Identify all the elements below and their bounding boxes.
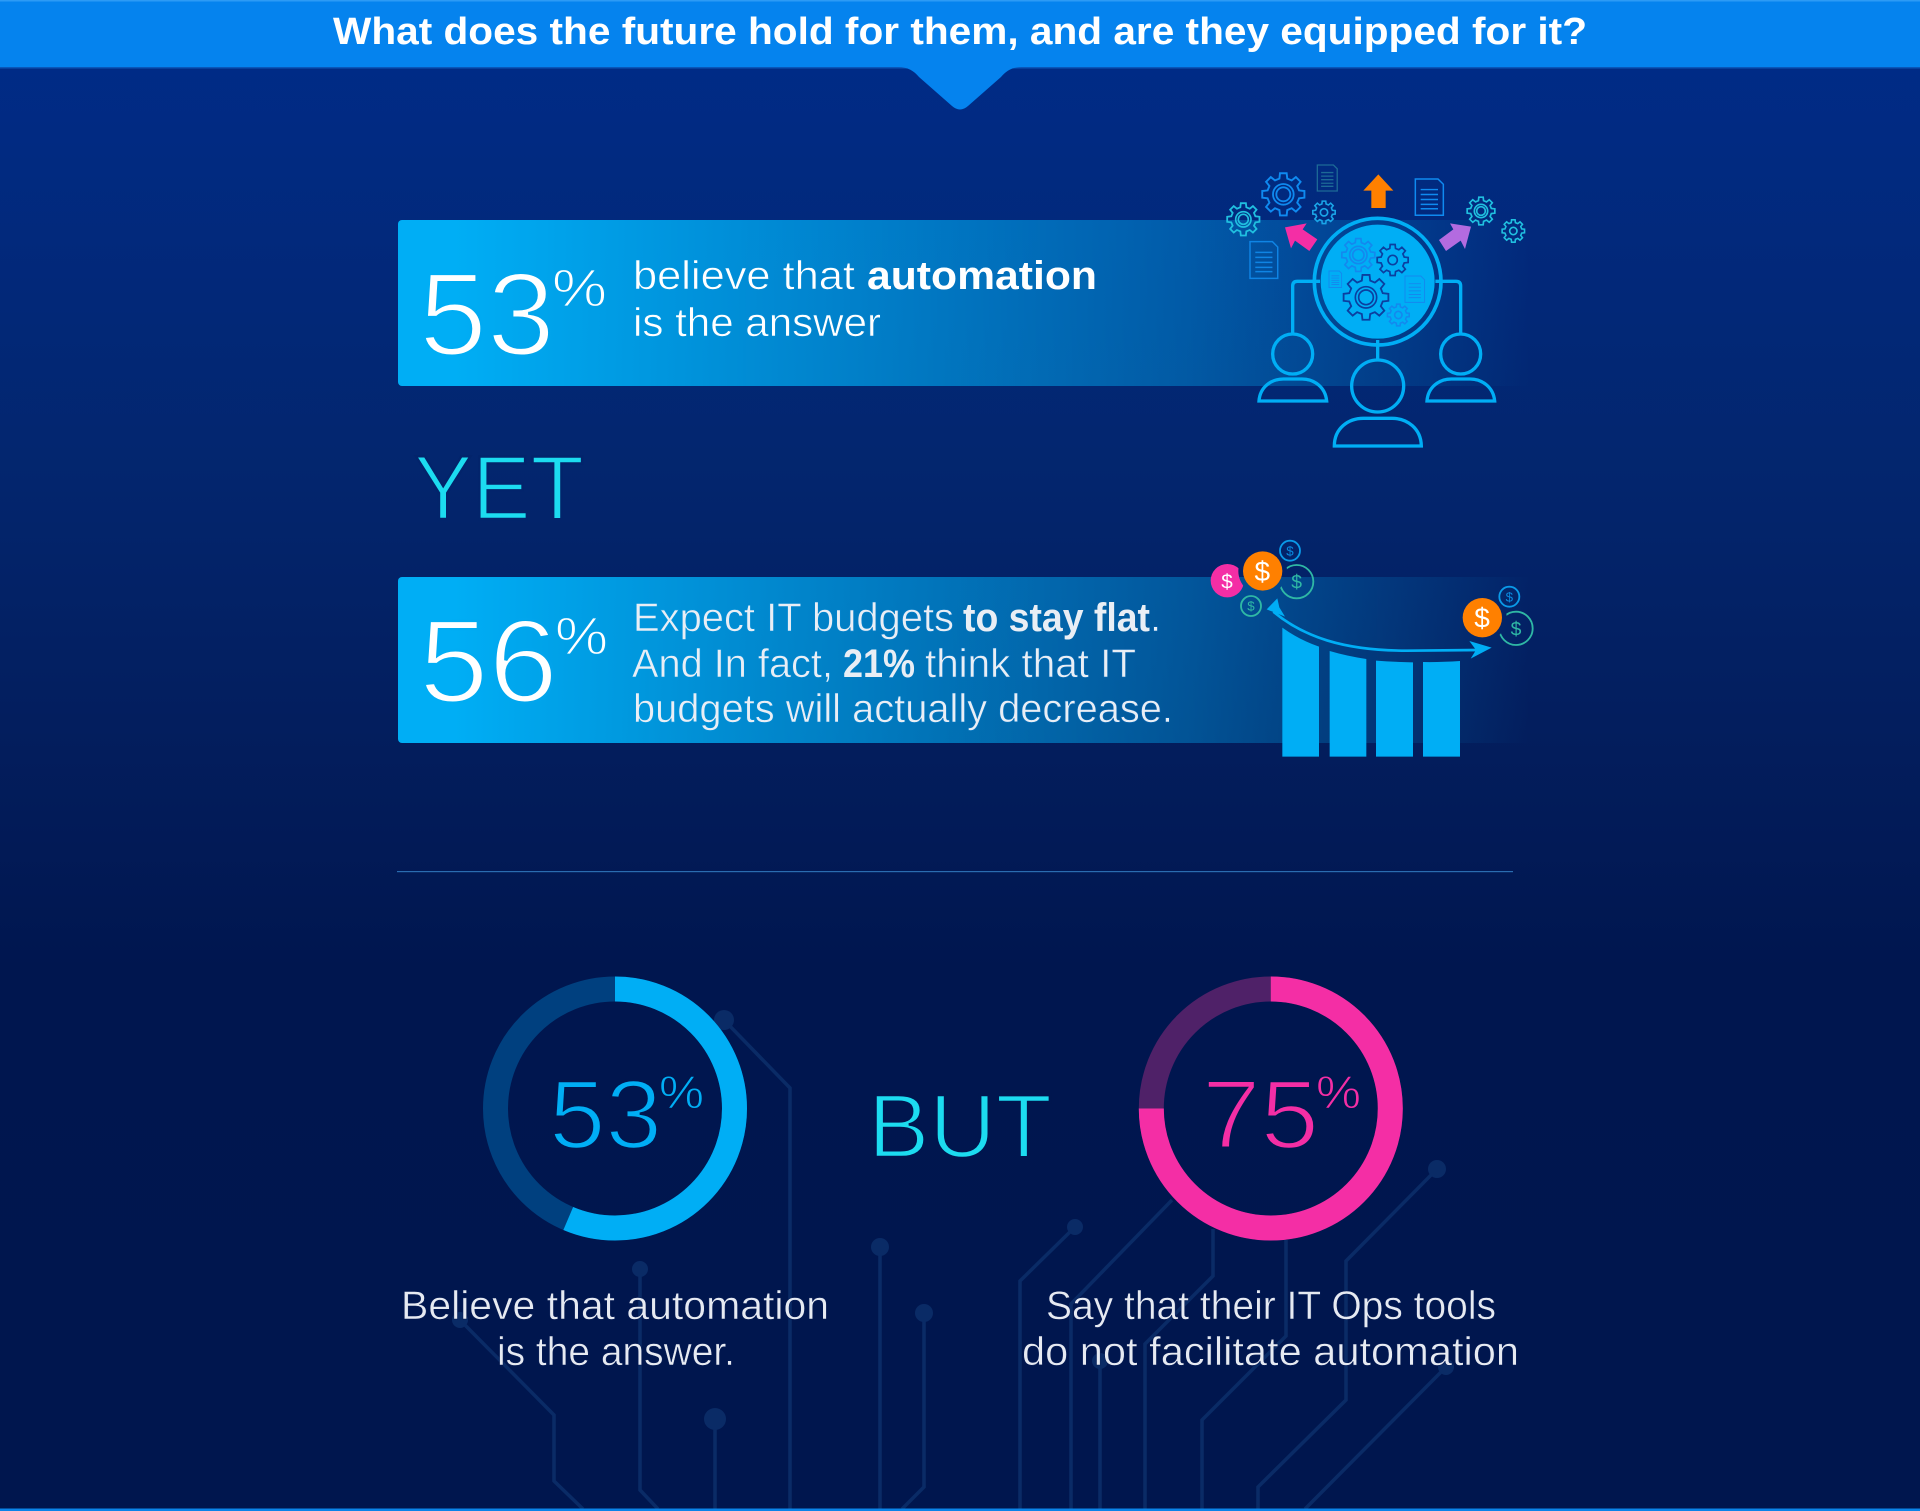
donut value 53%: 53 <box>549 1060 662 1169</box>
stat number 56% <box>419 596 608 728</box>
icon: coins left: $ <box>1255 556 1271 587</box>
caption: believe automation: is the answer. <box>497 1330 735 1374</box>
panel: automation stat <box>398 220 1538 386</box>
bar chart: flat budgets <box>1282 628 1460 757</box>
icon: coins left: $ <box>1291 573 1302 594</box>
donut chart: 75% <box>1151 989 1390 1228</box>
icon: three people with connectors <box>1259 281 1495 446</box>
icon: coins left: $ <box>1221 570 1233 593</box>
automation statement: is the answer <box>633 301 881 345</box>
caption: IT Ops tools <box>1022 1284 1519 1374</box>
BUT label: BUT <box>868 1077 1052 1177</box>
icon: coins left: $ <box>1247 599 1255 614</box>
decorative circuit lines <box>452 1010 1454 1509</box>
icon: coins right: $ <box>1506 589 1514 604</box>
stat number 56%: 56 <box>419 596 558 728</box>
budget statement: to stay flat <box>963 596 1150 640</box>
automation statement <box>633 254 1097 345</box>
icon: coins left <box>1211 541 1313 616</box>
YET label: YET <box>414 438 584 539</box>
caption: believe automation: Believe that automation <box>401 1284 829 1328</box>
donut value 53% <box>549 1060 704 1169</box>
budget statement: Expect IT budgets <box>633 596 954 640</box>
icon: coins right: $ <box>1511 619 1522 640</box>
stat number 53%: % <box>552 259 607 318</box>
donut value 75%: % <box>1316 1066 1361 1118</box>
budget statement: think that IT <box>925 642 1136 686</box>
arrow: budget trend <box>1267 598 1492 659</box>
automation statement: automation <box>867 254 1097 298</box>
banner with pointer <box>0 0 1920 110</box>
caption: IT Ops tools: do not facilitate automation <box>1022 1330 1519 1374</box>
donut value 75% <box>1202 1060 1361 1169</box>
stat number 53% <box>419 249 607 381</box>
donut value 75%: 75 <box>1202 1060 1319 1169</box>
stat number 56%: % <box>555 607 608 666</box>
caption: believe automation <box>401 1284 829 1374</box>
budget statement: 21% <box>843 642 915 686</box>
icon: floating gears and documents <box>1227 165 1525 278</box>
budget statement: . <box>1150 596 1161 640</box>
icon: output arrows <box>1285 174 1471 251</box>
icon: budget bars with coins <box>1211 541 1533 757</box>
budget statement: budgets will actually decrease. <box>633 687 1173 731</box>
budget statement <box>632 596 1173 731</box>
icon: coins left: $ <box>1286 543 1294 558</box>
icon: coins right: $ <box>1474 603 1490 634</box>
donut value 53%: % <box>659 1066 704 1118</box>
automation statement: believe that <box>633 254 855 298</box>
donut chart: 53% <box>496 989 734 1228</box>
icon: central circle <box>1314 218 1441 345</box>
stat number 53%: 53 <box>419 249 555 381</box>
budget statement: And In fact, <box>632 642 833 686</box>
icon: automation people and gears <box>1227 165 1525 446</box>
title: What does the future hold for them, and are they equipped for it? <box>333 11 1587 53</box>
icon: coins right <box>1463 587 1533 645</box>
caption: IT Ops tools: Say that their IT Ops tools <box>1046 1284 1496 1328</box>
panel: IT budgets stat <box>398 577 1538 743</box>
